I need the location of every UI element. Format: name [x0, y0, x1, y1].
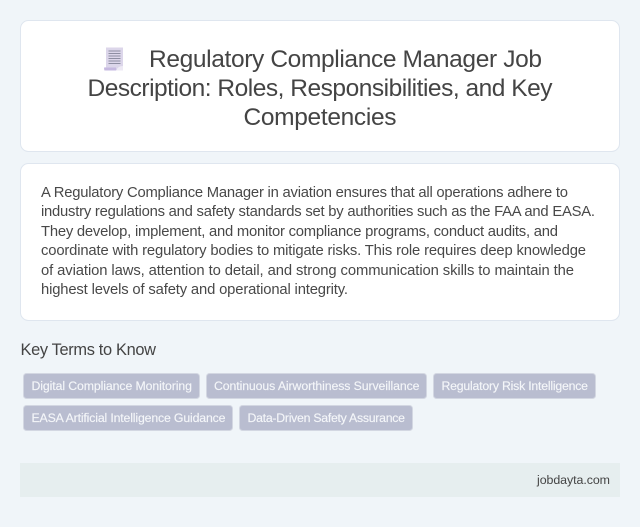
text block: description paragraph: coordinate with regulatory bodies to mitigate risks. This role requires deep knowledge: [41, 243, 586, 259]
icon: document scroll: [104, 48, 123, 70]
text block: description paragraph: highest levels of safety and operational integrity.: [41, 282, 348, 298]
tag: regulatory risk intelligence: [434, 374, 596, 398]
tag: continuous airworthiness surveillance: Continuous Airworthiness Surveillance: [214, 379, 420, 393]
title: Competencies: [244, 104, 396, 131]
footer: [20, 463, 620, 497]
tag: data-driven safety assurance: [240, 406, 412, 430]
title: Regulatory Compliance Manager Job: [149, 46, 542, 73]
tag: data-driven safety assurance: Data-Driven Safety Assurance: [248, 411, 405, 425]
text block: description paragraph: [41, 185, 595, 298]
tag: continuous airworthiness surveillance: [206, 374, 426, 398]
tag: digital compliance monitoring: Digital Compliance Monitoring: [32, 379, 192, 393]
footer: jobdayta.com: [536, 473, 610, 487]
tag: easa artificial intelligence guidance: EASA Artificial Intelligence Guidance: [32, 411, 226, 425]
tag: digital compliance monitoring: [24, 374, 200, 398]
title: Description: Roles, Responsibilities, and Key: [88, 75, 553, 102]
panel: description: [20, 164, 620, 320]
heading: key terms: Key Terms to Know: [20, 341, 156, 359]
text block: description paragraph: industry regulations and safety standards set by authorities such as the FAA and EASA.: [41, 204, 595, 220]
tag: easa artificial intelligence guidance: [24, 406, 232, 430]
text block: description paragraph: A Regulatory Compliance Manager in aviation ensures that all operations adhere to: [41, 185, 568, 201]
tag: regulatory risk intelligence: Regulatory Risk Intelligence: [442, 379, 588, 393]
text block: description paragraph: They develop, implement, and monitor compliance programs, conduct audits, and: [41, 224, 558, 240]
title: [88, 46, 553, 131]
text block: description paragraph: of aviation laws, attention to detail, and strong communication skills to maintain the: [41, 263, 574, 279]
panel: title card: [20, 20, 620, 152]
